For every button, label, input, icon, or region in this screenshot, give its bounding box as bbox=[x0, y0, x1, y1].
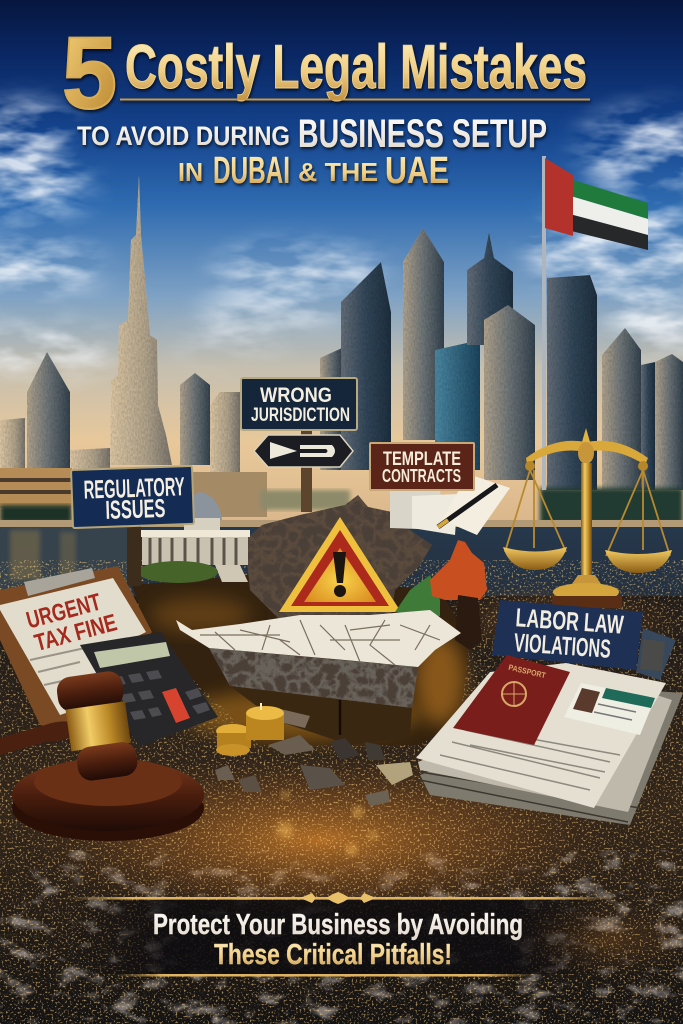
sky background bbox=[0, 0, 683, 540]
rubble bbox=[215, 707, 413, 806]
label text: TEMPLATE bbox=[383, 449, 461, 470]
label text: LABOR LAW bbox=[515, 602, 625, 640]
document stack bbox=[416, 663, 683, 825]
hedge bbox=[138, 561, 218, 583]
cracked rock mound bbox=[245, 495, 432, 620]
ember sparks bbox=[0, 560, 683, 1024]
label text: CONTRACTS bbox=[382, 466, 461, 486]
id card bbox=[564, 683, 655, 735]
clipboard: urgent tax fine bbox=[0, 566, 152, 730]
burj tower bbox=[110, 175, 172, 465]
handle bbox=[0, 721, 70, 755]
label text: URGENT bbox=[24, 589, 104, 634]
label text bbox=[24, 586, 120, 658]
sign: wrong jurisdiction bbox=[241, 378, 357, 512]
sound block bbox=[12, 758, 204, 841]
subtitle line 2: DUBAI bbox=[213, 150, 290, 192]
label text: WRONG bbox=[260, 384, 332, 407]
dome bbox=[180, 492, 222, 520]
label text: ISSUES bbox=[105, 493, 166, 525]
contract papers bbox=[390, 474, 510, 535]
gold coins bbox=[216, 703, 284, 756]
chains bbox=[505, 470, 670, 556]
subtitle line 2 bbox=[178, 150, 449, 192]
headline underline bbox=[120, 98, 590, 100]
top rule bbox=[65, 892, 615, 904]
subtitle line 2: UAE bbox=[385, 150, 449, 192]
gavel bbox=[0, 669, 204, 841]
label text: REGULATORY bbox=[83, 471, 185, 505]
subtitle line 1: BUSINESS SETUP bbox=[298, 112, 547, 156]
footer text line 2: These Critical Pitfalls! bbox=[214, 939, 452, 971]
footer text line 1: Protect Your Business by Avoiding bbox=[153, 909, 523, 941]
government building bbox=[138, 492, 250, 583]
flag pole and UAE flag bbox=[542, 156, 648, 490]
city skyline bbox=[0, 175, 683, 490]
scales of justice bbox=[503, 428, 672, 608]
sign: labor law violations bbox=[492, 600, 676, 680]
ember glow bbox=[20, 755, 620, 925]
title block bbox=[62, 16, 590, 192]
water bbox=[0, 527, 683, 627]
orange and green map fragments bbox=[395, 540, 487, 650]
passport: PASSPORT bbox=[508, 663, 547, 680]
label text: JURISDICTION bbox=[251, 405, 350, 426]
subtitle line 1 bbox=[77, 112, 547, 156]
head bbox=[55, 669, 139, 784]
footer banner bbox=[65, 892, 615, 976]
low-rise waterfront bbox=[0, 468, 683, 527]
label text bbox=[251, 384, 350, 426]
arrow sign bbox=[254, 435, 353, 467]
sign: regulatory issues bbox=[71, 466, 194, 586]
bright flares bbox=[277, 792, 376, 854]
cracked white slab bbox=[176, 610, 461, 745]
label text bbox=[83, 471, 186, 526]
banner backing bbox=[70, 900, 610, 974]
clouds bbox=[0, 104, 683, 370]
pen bbox=[438, 485, 497, 527]
subtitle line 1: TO AVOID DURING bbox=[77, 121, 290, 151]
warning triangle bbox=[279, 517, 401, 612]
calculator bbox=[80, 632, 218, 747]
label text: TAX FINE bbox=[32, 609, 120, 657]
base bbox=[568, 575, 605, 590]
passport bbox=[453, 655, 570, 745]
label text bbox=[382, 449, 461, 486]
ground rock texture bbox=[0, 850, 683, 1024]
numeral 5: 5 bbox=[62, 16, 117, 130]
sign: template contracts bbox=[370, 443, 510, 535]
cracked pit bbox=[132, 575, 470, 745]
bottom rule bbox=[115, 974, 535, 976]
slab side bbox=[209, 648, 418, 708]
ground bbox=[0, 560, 683, 1024]
pans bbox=[503, 547, 567, 570]
label text bbox=[513, 602, 625, 665]
subtitle line 2: IN bbox=[178, 157, 203, 187]
label text: VIOLATIONS bbox=[513, 627, 612, 664]
subtitle line 2: & THE bbox=[298, 157, 378, 187]
